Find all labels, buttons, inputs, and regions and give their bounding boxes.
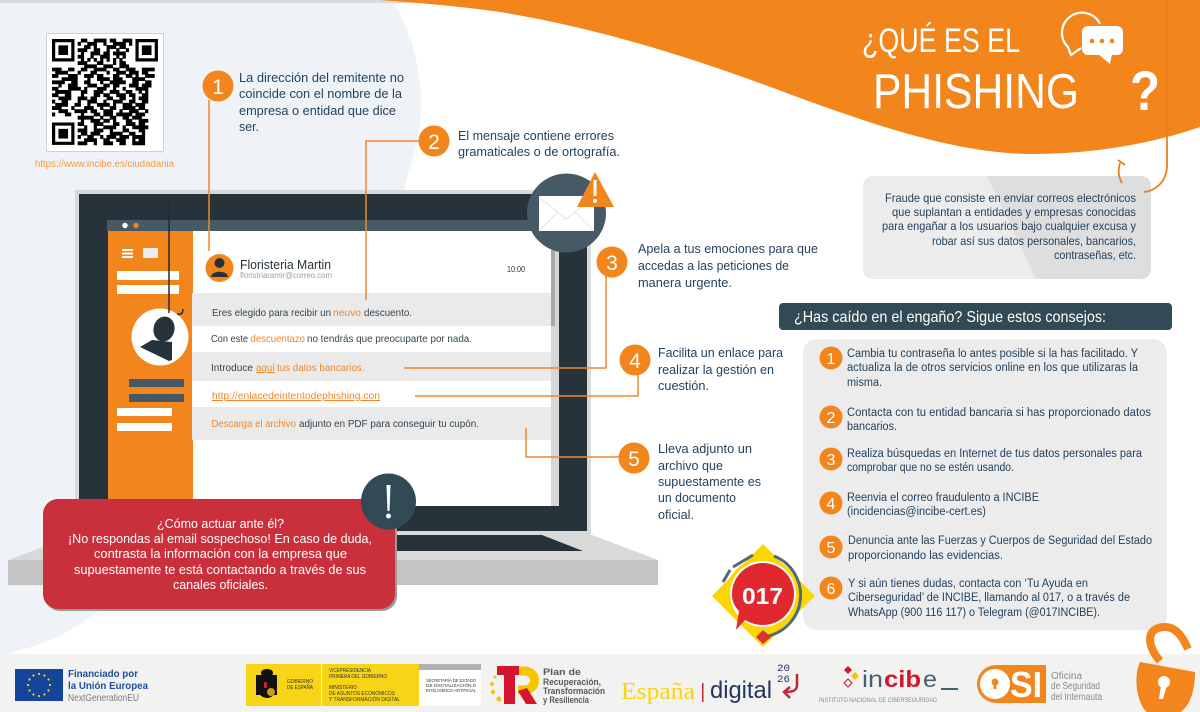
tip 2: Contacta con tu entidad bancaria si has proporcionado datos — [847, 407, 1151, 419]
hook line from banner to definition — [1118, 0, 1167, 192]
tips heading — [779, 303, 1172, 330]
tip 3: Realiza búsquedas en Internet de tus datos personales para — [847, 448, 1143, 460]
orange title banner — [380, 0, 1200, 154]
callout 2: gramaticales o de ortografía. — [458, 144, 620, 159]
callout 4: realizar la gestión en — [658, 362, 774, 377]
callout 1 — [202, 70, 404, 134]
tip 1: Cambia tu contraseña lo antes posible si la has facilitado. Y — [847, 348, 1138, 360]
callout 5 — [618, 441, 761, 522]
top shadow strip — [0, 0, 1200, 3]
callout 3: Apela a tus emociones para que — [638, 241, 818, 256]
logo: OSI: de Seguridad — [1051, 681, 1100, 692]
logo: INCIBE: e — [923, 666, 937, 692]
email row 3 — [192, 352, 551, 381]
logo: España digital: digital — [710, 677, 772, 704]
tip 2: bancarios. — [847, 421, 897, 433]
logo: European Union: NextGenerationEU — [68, 693, 139, 704]
callout 4: Facilita un enlace para — [658, 345, 784, 360]
logo: Gobierno de España: VICEPRESIDENCIA — [329, 668, 372, 674]
email sender — [206, 254, 525, 282]
tip 4 — [820, 492, 1039, 518]
email row 3: tus datos bancarios. — [277, 362, 364, 374]
callout 4: 4 — [629, 350, 641, 373]
callout 3: manera urgente. — [638, 275, 732, 290]
tip 5: 5 — [827, 540, 836, 557]
callout 1: La dirección del remitente no — [239, 70, 404, 85]
tip 1: actualiza la de otros servicios online en los que utilizaras la — [847, 362, 1139, 374]
tip 3: comprobar que no se estén usando. — [847, 462, 1014, 474]
laptop illustration — [8, 190, 658, 585]
email row 5: adjunto en PDF para conseguir tu cupón. — [299, 418, 479, 430]
panel: how to act: contrasta la información con la empresa que — [94, 546, 347, 561]
tip 4: Reenvia el correo fraudulento a INCIBE — [847, 492, 1039, 504]
callout 2: 2 — [428, 131, 440, 154]
laptop base top — [8, 535, 658, 560]
panel: how to act — [43, 499, 397, 611]
logo: INCIBE — [819, 666, 958, 704]
QR code — [46, 34, 164, 152]
tip 2: 2 — [827, 410, 836, 427]
email row 4 — [192, 381, 551, 407]
callout 5: supuestamente es — [658, 474, 761, 489]
logo: Plan de Recuperación: Transformación — [543, 686, 605, 696]
callout 5: 5 — [628, 448, 640, 471]
logo: European Union: la Unión Europea — [68, 681, 148, 692]
logo: Gobierno de España: INTELIGENCIA ARTIFICIAL — [426, 688, 477, 693]
email sender: 10:00 — [507, 265, 525, 274]
panel: definition: para engañar a los usuarios bajo cualquier excusa y — [882, 219, 1136, 233]
logo: Plan de Recuperación: Recuperación, — [543, 677, 601, 687]
callout 3: accedas a las peticiones de — [638, 258, 789, 273]
connector lines — [209, 100, 638, 457]
callout 2: El mensaje contiene errores — [458, 128, 614, 143]
logo: España digital: 20 — [777, 664, 790, 675]
tip 6: 6 — [827, 581, 836, 598]
email sender: Floristeria Martin — [240, 258, 331, 272]
icon: email warning — [527, 172, 614, 252]
email row 5: Descarga el archivo — [212, 418, 296, 430]
logo: Gobierno de España: SECRETARÍA DE ESTADO — [426, 678, 477, 683]
panel: how to act: supuestamente te está contactando a través de sus — [74, 562, 366, 577]
panel: definition: Fraude que consiste en enviar correos electrónicos — [885, 191, 1136, 205]
fishing hook — [169, 200, 183, 314]
callout 2 — [418, 126, 620, 159]
QR link: https://www.incibe.es/ciudadania — [35, 159, 174, 170]
tip 6: Y si aún tienes dudas, contacta con ‘Tu Ayuda en — [848, 578, 1088, 590]
email row 1 — [192, 293, 551, 326]
logo: INCIBE: INSTITUTO NACIONAL DE CIBERSEGURIDAD — [819, 698, 938, 704]
logo: OSI: Oficina — [1051, 671, 1082, 682]
logo: España digital: España — [621, 679, 695, 705]
tip 5: Denuncia ante las Fuerzas y Cuerpos de Seguridad del Estado — [848, 535, 1152, 547]
panel: definition: que suplantan a entidades y empresas conocidas — [892, 205, 1136, 219]
logo: OSI — [977, 664, 1102, 705]
logo: Gobierno de España: Y TRANSFORMACIÓN DIGITAL — [329, 696, 400, 703]
scrollbar — [551, 231, 559, 506]
callout 1: ser. — [239, 119, 259, 134]
tip 1: 1 — [827, 351, 836, 368]
email row 3: Introduce — [211, 362, 253, 374]
logo: OSI: SI — [1010, 664, 1042, 705]
callout 1: 1 — [212, 76, 224, 99]
laptop screen frame — [75, 190, 591, 535]
tip 6 — [820, 576, 1130, 619]
logo: European Union — [15, 669, 148, 704]
tip 6: WhatsApp (900 116 117) o Telegram (@017INCIBE). — [848, 607, 1100, 619]
logo: Plan de Recuperación: Plan de — [543, 667, 581, 677]
email row 2: no tendrás que preocuparte por nada. — [307, 333, 472, 345]
window title bar — [107, 220, 560, 231]
callout 5: Lleva adjunto un — [658, 441, 752, 456]
email row 1: Eres elegido para recibir un — [212, 307, 331, 319]
icon: chat bubbles — [1062, 13, 1123, 64]
email sender: floristriaramir@correo.com — [240, 271, 332, 280]
panel: how to act: ¿Cómo actuar ante él? — [157, 516, 284, 531]
pale blue background shape — [0, 2, 421, 655]
callout 5: oficial. — [658, 507, 694, 522]
icon: open padlock — [1136, 627, 1195, 712]
panel: definition: contraseñas, etc. — [1054, 248, 1136, 262]
callout 5: archivo que — [658, 458, 723, 473]
email row 2: descuentazo — [250, 333, 305, 345]
panel: definition: robar así sus datos personales, bancarios, — [932, 234, 1136, 248]
laptop screen bezel — [79, 194, 587, 531]
callout 3: 3 — [606, 252, 618, 275]
email row 5 — [192, 407, 551, 440]
callout 4: cuestión. — [658, 378, 709, 393]
panel: definition — [863, 176, 1151, 279]
logo: Gobierno de España: MINISTERIO — [329, 685, 357, 691]
email row 4: http://enlacedeintentodephishing.con — [212, 390, 380, 402]
panel: tips — [803, 339, 1167, 630]
title heading: ¿QUÉ ES EL — [862, 22, 1020, 60]
logo: INCIBE: cib — [884, 666, 921, 692]
tip 5: proporcionando las evidencias. — [848, 550, 1003, 562]
logo: España digital: 26 — [777, 675, 790, 686]
email row 3: aquí — [256, 362, 275, 374]
footer band — [0, 654, 1200, 712]
logo: España digital — [621, 664, 797, 705]
panel: email content background — [193, 231, 551, 506]
tip 4: 4 — [827, 496, 836, 513]
tip 2 — [820, 406, 1151, 433]
tip 1 — [820, 346, 1139, 389]
title heading — [862, 22, 1160, 122]
callout 1: coincide con el nombre de la — [239, 86, 403, 101]
tip 4: (incidencias@incibe-cert.es) — [847, 506, 986, 518]
logo: Gobierno de España: PRIMERA DEL GOBIERNO — [329, 674, 387, 680]
email row 2: Con este — [211, 333, 248, 345]
tip 3: 3 — [827, 452, 836, 469]
logo: Gobierno de España: GOBIERNO — [287, 679, 313, 685]
logo: Gobierno de España — [246, 664, 481, 706]
email row 1: descuento. — [364, 307, 412, 319]
email row 1: neuvo — [333, 307, 361, 319]
laptop base front — [8, 560, 658, 585]
tip 1: misma. — [847, 377, 882, 389]
logo: Gobierno de España: DE DIGITALIZACIÓN E — [426, 683, 476, 688]
panel: how to act: canales oficiales. — [173, 577, 268, 592]
tip 3 — [820, 448, 1143, 474]
email row 2 — [192, 326, 551, 352]
tips heading: ¿Has caído en el engaño? Sigue estos consejos: — [794, 309, 1106, 326]
logo: Plan de Recuperación: y Resiliencia — [543, 695, 590, 705]
logo: Gobierno de España: DE ESPAÑA — [287, 684, 314, 691]
tip 5 — [820, 535, 1152, 562]
tip 6: Ciberseguridad’ de INCIBE, llamando al 017, o a través de — [848, 592, 1130, 604]
callout 4 — [620, 344, 784, 393]
badge: 017 — [712, 544, 815, 647]
logo: OSI: del Internauta — [1051, 692, 1102, 703]
icon: exclamation — [361, 474, 416, 530]
laptop keyboard hinge — [50, 535, 583, 551]
logo: Plan de Recuperación — [490, 666, 605, 705]
callout 1: empresa o entidad que dice — [239, 103, 396, 118]
logo: Gobierno de España: DE ASUNTOS ECONÓMICOS — [329, 690, 396, 697]
panel: how to act: ¡No respondas al email sospechoso! En caso de duda, — [68, 531, 372, 546]
badge: 017: 017 — [742, 583, 783, 609]
callout 3 — [596, 241, 818, 290]
logo: European Union: Financiado por — [68, 669, 138, 680]
title heading: ? — [1130, 59, 1160, 122]
callout 5: un documento — [658, 490, 736, 505]
title heading: PHISHING — [873, 65, 1079, 119]
panel: email sidebar — [108, 231, 193, 506]
logo: INCIBE: in — [862, 666, 883, 692]
